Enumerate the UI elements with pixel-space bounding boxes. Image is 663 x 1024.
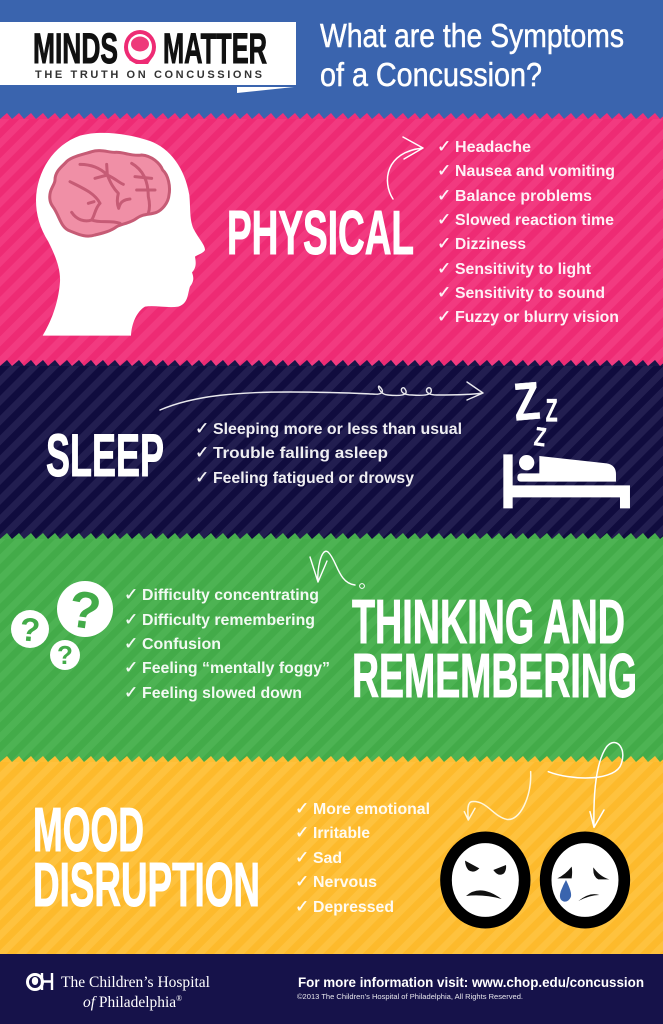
logo: Minds Matter: THE TRUTH ON CONCUSSIONS (35, 69, 262, 81)
arrow: sleep (160, 382, 483, 410)
list: physical symptoms: Slowed reaction time (455, 212, 614, 229)
list: thinking symptoms: Confusion (142, 636, 221, 653)
list: physical symptoms: ✓ (437, 259, 451, 279)
icon: question marks: ? (18, 610, 42, 649)
list: mood symptoms: ✓ (295, 799, 309, 819)
title: of a Concussion? (320, 56, 542, 93)
logo: Children's Hospital of Philadelphia: ® (176, 994, 182, 1003)
list: sleep symptoms: Sleeping more or less than usual (213, 421, 462, 438)
list: physical symptoms: ✓ (437, 234, 451, 254)
icon: sleeping person in bed (503, 372, 630, 508)
logo: Minds Matter: MATTER (163, 25, 267, 73)
text: copyright: ©2013 The Children’s Hospital of Philadelphia, All Rights Reserved. (297, 992, 523, 1001)
list: thinking symptoms: ✓ (124, 658, 138, 678)
panel: mood disruption (0, 743, 663, 955)
icon: sleeping person in bed: Z (532, 421, 548, 453)
icon: sleeping person in bed: Z (511, 372, 542, 433)
list: thinking symptoms: Difficulty concentrating (142, 587, 319, 604)
icon: crying face (546, 837, 624, 923)
list: sleep symptoms: ✓ (195, 419, 209, 439)
list: mood symptoms: More emotional (313, 801, 430, 818)
panel: footer (0, 954, 663, 1024)
arrow: thinking (310, 551, 364, 588)
heading: sleep: SLEEP (46, 422, 164, 489)
list: physical symptoms: Headache (455, 139, 531, 156)
list: thinking symptoms: ✓ (124, 683, 138, 703)
text: more information: For more information visit: www.chop.edu/concussion (298, 974, 644, 990)
list: mood symptoms: Sad (313, 850, 342, 867)
logo: Minds Matter: MINDS (33, 25, 118, 73)
title (320, 17, 624, 93)
list: physical symptoms: ✓ (437, 137, 451, 157)
list: sleep symptoms: ✓ (195, 443, 209, 463)
list: mood symptoms: ✓ (295, 823, 309, 843)
list: sleep symptoms (195, 419, 462, 488)
list: thinking symptoms: ✓ (124, 634, 138, 654)
list: physical symptoms (437, 137, 619, 327)
logo: Children's Hospital of Philadelphia: of Philadelphia (83, 994, 179, 1011)
arrows: mood (464, 743, 623, 827)
list: mood symptoms: ✓ (295, 848, 309, 868)
list: physical symptoms: Balance problems (455, 188, 592, 205)
list: mood symptoms (295, 799, 430, 917)
list: mood symptoms: Irritable (313, 825, 370, 842)
icon: question marks: ? (65, 580, 104, 642)
logo: Children's Hospital of Philadelphia: The Children’s Hospital (61, 974, 211, 991)
list: thinking symptoms: Difficulty remembering (142, 612, 315, 629)
list: thinking symptoms: Feeling slowed down (142, 685, 302, 702)
list: physical symptoms: Fuzzy or blurry vision (455, 309, 619, 326)
list: sleep symptoms: Feeling fatigued or drowsy (213, 470, 414, 487)
list: thinking symptoms (124, 585, 330, 703)
list: sleep symptoms: ✓ (195, 468, 209, 488)
list: physical symptoms: Sensitivity to light (455, 261, 592, 278)
list: mood symptoms: ✓ (295, 872, 309, 892)
list: physical symptoms: Sensitivity to sound (455, 285, 605, 302)
heading: mood disruption (33, 796, 260, 920)
icon: angry face (446, 837, 525, 923)
list: physical symptoms: ✓ (437, 307, 451, 327)
list: sleep symptoms: Trouble falling asleep (213, 445, 388, 462)
list: physical symptoms: ✓ (437, 210, 451, 230)
list: physical symptoms: ✓ (437, 186, 451, 206)
logo: Minds Matter (0, 22, 296, 93)
list: physical symptoms: Dizziness (455, 236, 526, 253)
icon: head with brain (36, 133, 205, 336)
icon: question marks (11, 580, 113, 670)
panel: thinking and remembering (0, 533, 663, 762)
heading: mood disruption: DISRUPTION (33, 851, 260, 920)
heading: physical: PHYSICAL (227, 199, 414, 268)
heading: mood disruption: MOOD (33, 796, 144, 865)
heading: thinking and remembering (352, 588, 637, 711)
panel: header (0, 0, 663, 119)
icon: sleeping person in bed: Z (546, 393, 558, 429)
list: thinking symptoms: Feeling “mentally foggy” (142, 660, 330, 677)
list: physical symptoms: Nausea and vomiting (455, 163, 615, 180)
panel: physical (0, 113, 663, 366)
arrow: physical (387, 137, 423, 199)
panel: sleep (0, 360, 663, 539)
list: mood symptoms: ✓ (295, 897, 309, 917)
logo: Children's Hospital of Philadelphia (28, 973, 211, 1011)
list: thinking symptoms: ✓ (124, 585, 138, 605)
list: mood symptoms: Depressed (313, 899, 394, 916)
list: physical symptoms: ✓ (437, 283, 451, 303)
list: mood symptoms: Nervous (313, 874, 377, 891)
icon: question marks: ? (57, 640, 73, 670)
list: thinking symptoms: ✓ (124, 610, 138, 630)
list: physical symptoms: ✓ (437, 161, 451, 181)
